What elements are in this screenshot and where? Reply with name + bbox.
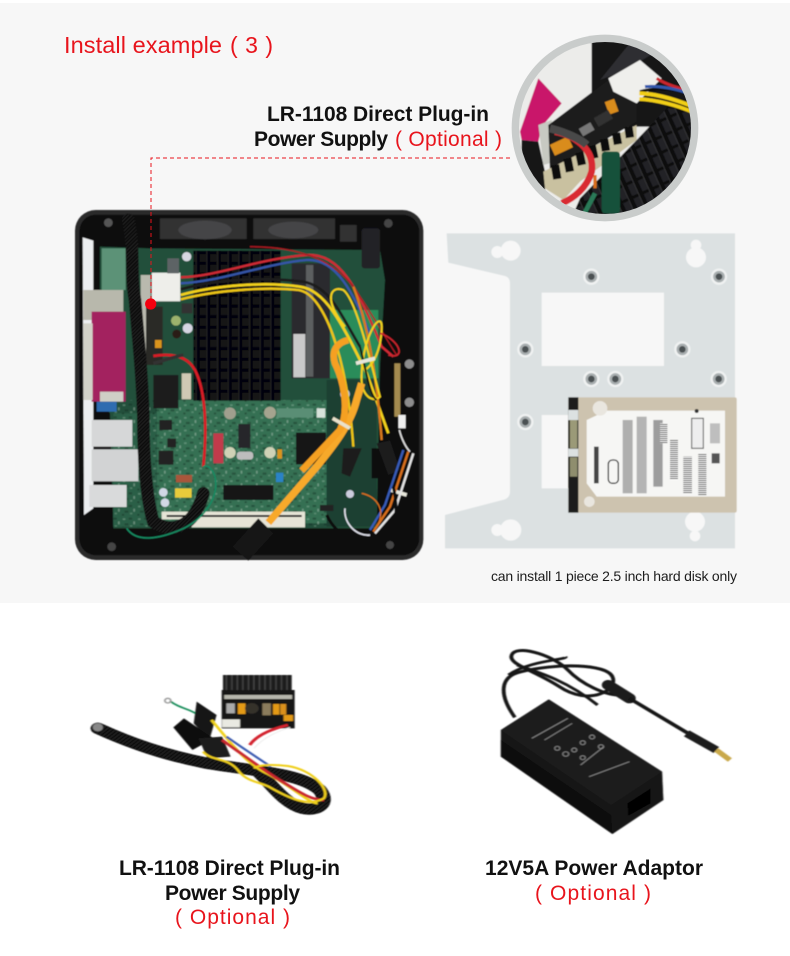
adaptor body: [501, 699, 663, 834]
label: LR-1108 power supply: Power Supply: [165, 882, 300, 905]
heading: LR-1108 direct plug-in power supply optional: ( Optional ): [395, 128, 502, 151]
cable ties: [333, 418, 350, 428]
red power cable: [153, 355, 205, 467]
RAM slots: [292, 263, 330, 378]
heatsink: [193, 251, 281, 401]
heading: LR-1108 direct plug-in power supply optional: LR-1108 Direct Plug-in: [267, 103, 489, 126]
label: LR-1108 power supply: LR-1108 Direct Plug-in: [119, 857, 340, 880]
PCI slot: [162, 512, 305, 527]
SATA plugs: [233, 518, 273, 561]
cable loops: [331, 289, 382, 399]
photo: 12V5A power adaptor: [501, 651, 730, 834]
panel: install example background: [0, 3, 790, 603]
black plugs: [194, 702, 217, 740]
chips: [605, 99, 619, 115]
IEC socket: [627, 788, 651, 816]
rivets: [518, 270, 726, 429]
photo: open mini PC case with motherboard: [75, 210, 423, 561]
front panel strip: [394, 363, 400, 417]
white connector: [608, 60, 662, 103]
board: [222, 690, 295, 728]
photo: LR-1108 power supply with cables: [93, 675, 325, 809]
fins: [575, 107, 691, 214]
case shell: [75, 210, 423, 560]
magenta port: [520, 78, 562, 142]
ferrite bead: [608, 685, 629, 698]
label: LR-1108 power supply: ( Optional ): [175, 906, 290, 929]
rear ports: [83, 290, 123, 320]
fans: [160, 218, 247, 239]
PSU board: [548, 92, 628, 169]
white rear opening: [83, 237, 93, 515]
label: 12V5A power adaptor: ( Optional ): [535, 882, 651, 905]
connector pins: [223, 675, 292, 694]
label: LR-1108 power supply: [119, 857, 340, 929]
photo: metal mounting bracket with hard disk: [445, 233, 737, 548]
bundled wires: [212, 720, 318, 803]
red and black wires from board: [250, 725, 288, 745]
heading: LR-1108 direct plug-in power supply optional: Power Supply: [254, 128, 388, 151]
ribbon wires: [375, 453, 413, 533]
label: 12V5A power adaptor: 12V5A Power Adaptor: [485, 857, 703, 880]
white connector: [152, 273, 180, 301]
label: 12V5A power adaptor: [485, 857, 703, 905]
hard disk: [568, 397, 737, 513]
motherboard: [100, 247, 385, 528]
capacitor: [602, 152, 620, 213]
bracket: [538, 120, 555, 165]
hard disk label print: [594, 447, 599, 483]
title: install example: ( 3 ): [230, 32, 273, 58]
caption: hard disk note: can install 1 piece 2.5 inch hard disk only: [491, 568, 737, 584]
green wire and ring terminal: [170, 701, 197, 714]
keyholes: [491, 240, 706, 541]
red and gray cables: [555, 132, 592, 203]
photo: magnified circular inset of power board: [510, 35, 702, 222]
red marker dot: [145, 298, 156, 310]
orange SATA: [268, 383, 362, 523]
white plug: [222, 719, 240, 727]
capacitors and chips: [182, 252, 191, 261]
PSU board: [141, 275, 151, 363]
wires to connector: [181, 255, 393, 357]
heading: LR-1108 direct plug-in power supply optional: [254, 103, 502, 151]
title: install example: Install example: [64, 32, 222, 58]
green ground wire: [127, 466, 216, 538]
braided sleeve: [128, 220, 203, 528]
cord: [504, 651, 623, 717]
printed markings: [532, 718, 629, 777]
screws: [104, 218, 113, 227]
red dashed leader line: [151, 158, 510, 300]
braided sleeve: [98, 728, 324, 809]
